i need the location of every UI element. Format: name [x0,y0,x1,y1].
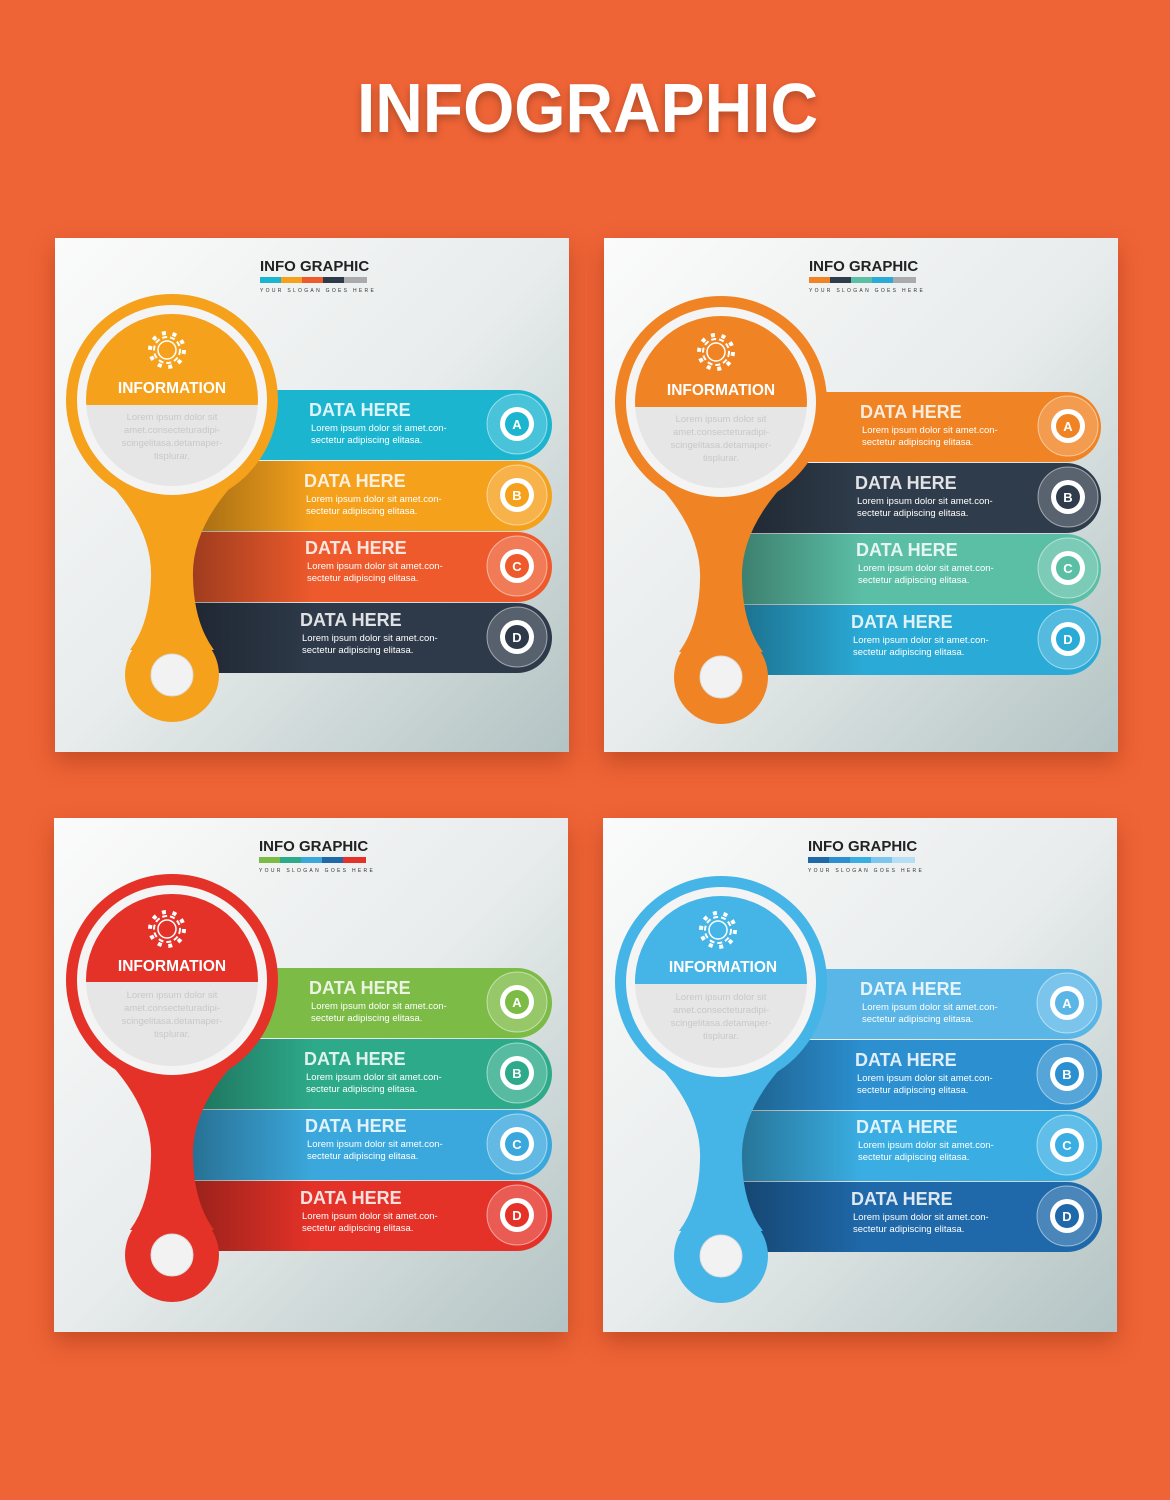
bars: sectetur adipiscing elitasa. [302,645,413,656]
bars: sectetur adipiscing elitasa. [307,573,418,584]
bars: sectetur adipiscing elitasa. [311,1013,422,1024]
header logo: YOUR SLOGAN GOES HERE [259,868,375,874]
panel: red variant [54,818,568,1332]
header logo: INFO GRAPHIC [259,838,368,855]
badges: B [512,488,522,503]
header logo: INFO GRAPHIC [260,258,369,275]
info circle: scingelitasa.detamaper- [122,438,222,449]
info circle: Lorem ipsum dolor sit [676,992,767,1003]
bars: Lorem ipsum dolor sit amet.con- [306,1072,442,1083]
info circle: scingelitasa.detamaper- [671,1018,771,1029]
header logo: INFO GRAPHIC [809,258,918,275]
info circle: amet.consecteturadipi- [673,1005,769,1016]
bars: Lorem ipsum dolor sit amet.con- [302,633,438,644]
badges [1037,973,1097,1246]
badges: C [1063,561,1073,576]
bars: sectetur adipiscing elitasa. [307,1151,418,1162]
header logo [260,258,376,294]
badges [1038,396,1098,669]
bars: Lorem ipsum dolor sit amet.con- [857,1073,993,1084]
info circle: scingelitasa.detamaper- [122,1016,222,1027]
bars: sectetur adipiscing elitasa. [306,1084,417,1095]
bars: sectetur adipiscing elitasa. [862,437,973,448]
bars: Lorem ipsum dolor sit amet.con- [853,1212,989,1223]
bars: Lorem ipsum dolor sit amet.con- [311,423,447,434]
bars: DATA HERE [860,402,962,422]
badges: B [512,1066,522,1081]
bars: Lorem ipsum dolor sit amet.con- [862,425,998,436]
info circle: Lorem ipsum dolor sit [676,414,767,425]
badges: A [1063,419,1073,434]
badges: B [1063,490,1073,505]
bars: sectetur adipiscing elitasa. [857,508,968,519]
badges: C [512,1137,522,1152]
info circle: tisplurar. [703,453,739,464]
magnifier handle [615,876,827,1303]
info circle: amet.consecteturadipi- [124,425,220,436]
info circle: amet.consecteturadipi- [673,427,769,438]
badges: A [1062,996,1072,1011]
bars: sectetur adipiscing elitasa. [306,506,417,517]
panel: orange variant [55,238,569,752]
info circle: amet.consecteturadipi- [124,1003,220,1014]
bars: Lorem ipsum dolor sit amet.con- [307,561,443,572]
info circle: scingelitasa.detamaper- [671,440,771,451]
header logo [808,838,924,874]
badges: D [512,1208,522,1223]
header logo [809,258,925,294]
bars: sectetur adipiscing elitasa. [858,1152,969,1163]
bars: Lorem ipsum dolor sit amet.con- [302,1211,438,1222]
bars: DATA HERE [300,1188,402,1208]
bars: sectetur adipiscing elitasa. [311,435,422,446]
bars: DATA HERE [851,612,953,632]
bars: DATA HERE [309,400,411,420]
bars [185,390,552,673]
bars: Lorem ipsum dolor sit amet.con- [857,496,993,507]
magnifier handle [66,294,278,722]
badges: A [512,417,522,432]
info circle: INFORMATION [669,959,777,976]
info circle: INFORMATION [118,380,226,397]
panel: dark orange variant [604,238,1118,752]
bars: DATA HERE [856,540,958,560]
bars: DATA HERE [304,471,406,491]
bars: DATA HERE [856,1117,958,1137]
header logo: YOUR SLOGAN GOES HERE [808,868,924,874]
magnifier handle [615,296,827,724]
bars: sectetur adipiscing elitasa. [857,1085,968,1096]
bars: sectetur adipiscing elitasa. [853,1224,964,1235]
bars: sectetur adipiscing elitasa. [862,1014,973,1025]
info circle [77,305,267,495]
bars: DATA HERE [309,978,411,998]
bars: sectetur adipiscing elitasa. [302,1223,413,1234]
bars: DATA HERE [855,473,957,493]
badges: C [512,559,522,574]
bars: DATA HERE [300,610,402,630]
bars: Lorem ipsum dolor sit amet.con- [858,1140,994,1151]
magnifier handle [66,874,278,1302]
info circle: tisplurar. [154,1029,190,1040]
badges: D [1063,632,1073,647]
bars: DATA HERE [304,1049,406,1069]
info circle: Lorem ipsum dolor sit [127,412,218,423]
badges: A [512,995,522,1010]
badges [487,972,547,1245]
bars: sectetur adipiscing elitasa. [858,575,969,586]
panel: blue variant [603,818,1117,1332]
info circle [626,887,816,1077]
badges: C [1062,1138,1072,1153]
bars: DATA HERE [851,1189,953,1209]
info circle: Lorem ipsum dolor sit [127,990,218,1001]
header logo: YOUR SLOGAN GOES HERE [809,288,925,294]
info circle: INFORMATION [667,382,775,399]
bars [184,968,552,1251]
bars: Lorem ipsum dolor sit amet.con- [307,1139,443,1150]
bars [733,969,1102,1252]
badges [487,394,547,667]
bars [734,392,1101,675]
bars: Lorem ipsum dolor sit amet.con- [853,635,989,646]
info circle: tisplurar. [703,1031,739,1042]
bars: DATA HERE [305,538,407,558]
info circle [626,307,816,497]
info circle: tisplurar. [154,451,190,462]
header logo: INFO GRAPHIC [808,838,917,855]
header logo [259,838,375,874]
badges: D [512,630,522,645]
info circle: INFORMATION [118,958,226,975]
bars: DATA HERE [860,979,962,999]
bars: Lorem ipsum dolor sit amet.con- [862,1002,998,1013]
bars: sectetur adipiscing elitasa. [853,647,964,658]
title: INFOGRAPHIC [357,69,818,147]
bars: Lorem ipsum dolor sit amet.con- [311,1001,447,1012]
bars: DATA HERE [305,1116,407,1136]
info circle [77,885,267,1075]
badges: D [1062,1209,1072,1224]
header logo: YOUR SLOGAN GOES HERE [260,288,376,294]
badges: B [1062,1067,1072,1082]
bars: DATA HERE [855,1050,957,1070]
bars: Lorem ipsum dolor sit amet.con- [858,563,994,574]
bars: Lorem ipsum dolor sit amet.con- [306,494,442,505]
